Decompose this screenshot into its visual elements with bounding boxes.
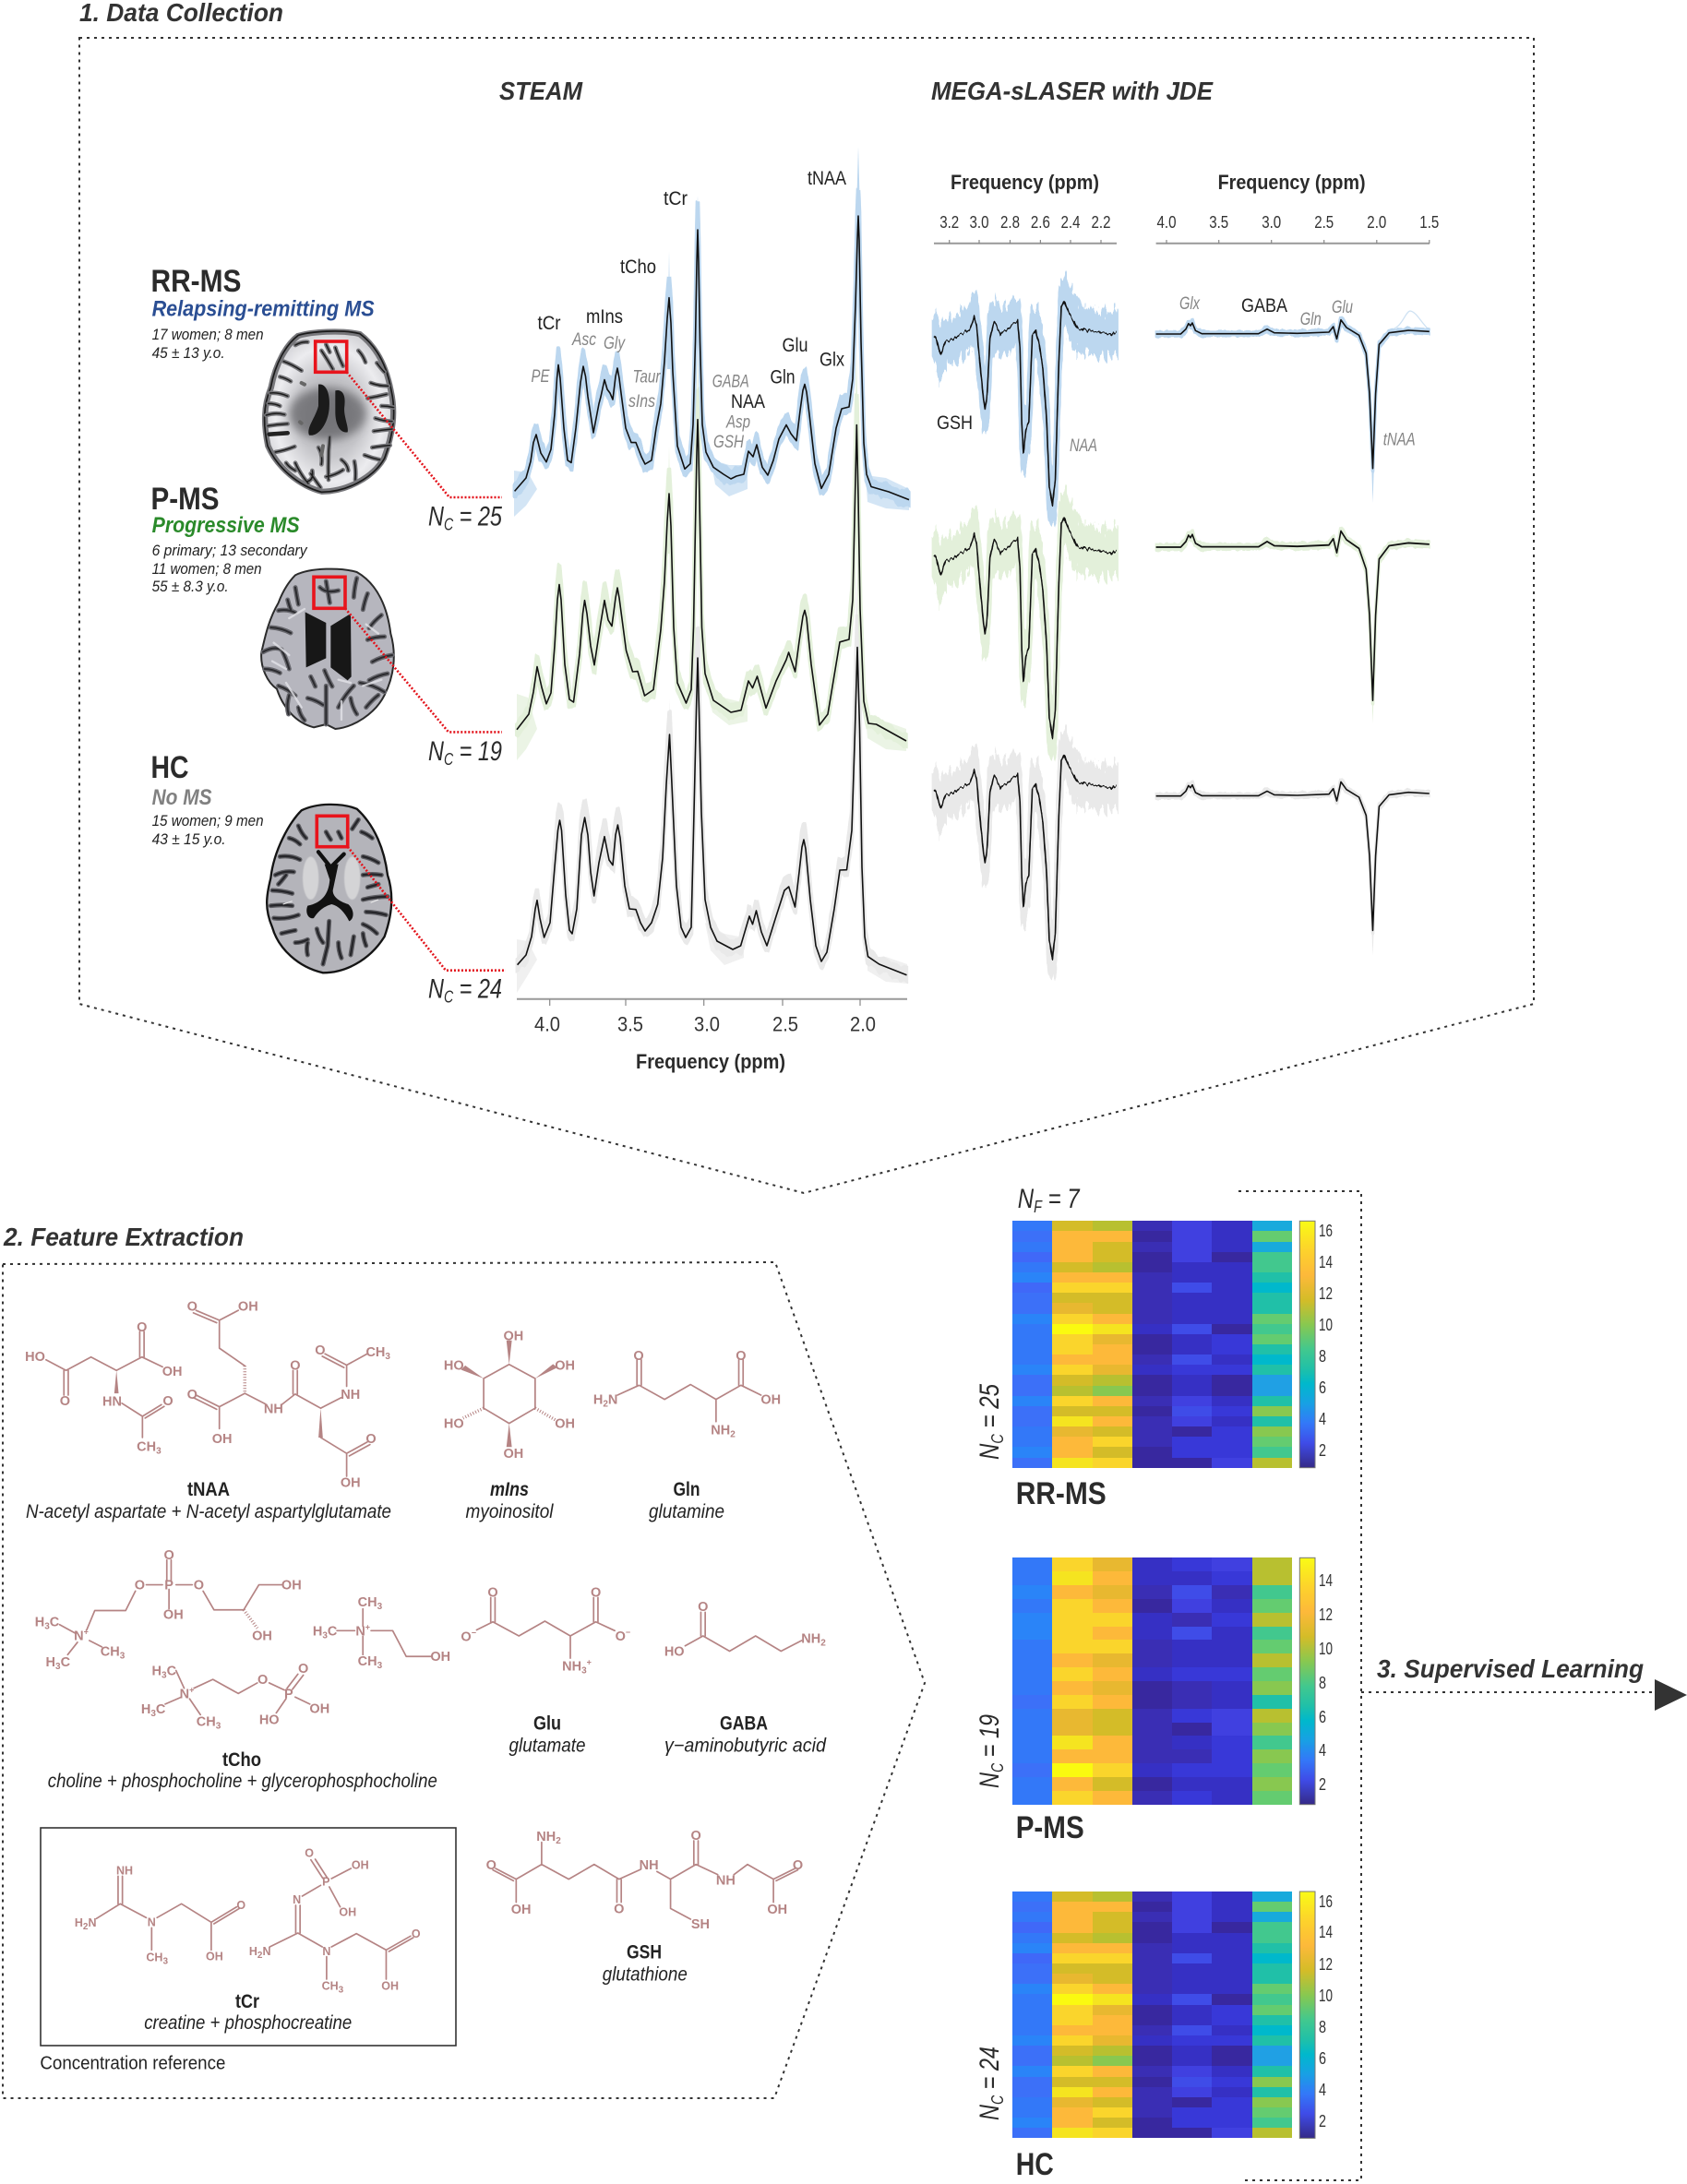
molecule atoms: tCr: N <box>322 1945 330 1958</box>
group label: RR-MS: 17 women; 8 men <box>152 326 264 343</box>
molecule atoms: GSH: NH <box>716 1873 736 1888</box>
heatmap: HC <box>1012 1892 1292 2138</box>
label: NF 7: = 7 <box>1042 1184 1081 1214</box>
colorbar: P-MS <box>1299 1557 1333 1805</box>
molecule atoms: tNAA: CH3 <box>137 1439 162 1456</box>
molecule atoms: Gln: NH2 <box>711 1423 736 1439</box>
STEAM peak labels: Asp <box>725 413 750 432</box>
STEAM peak labels: GABA <box>712 373 749 391</box>
molecule atoms: mIns <box>444 1329 575 1462</box>
colorbar: P-MS: 6 <box>1319 1708 1326 1726</box>
molecule atoms: tCr: H2N <box>249 1945 271 1961</box>
caption: mIns <box>465 1479 555 1522</box>
label: NC 25: = 25 <box>453 502 502 532</box>
label: NC 24: C <box>444 988 454 1007</box>
molecule atoms: tCr: O <box>412 1927 421 1940</box>
molecule atoms: Glu: NH3+ <box>562 1658 592 1677</box>
group label: HC: No MS <box>152 785 212 810</box>
molecule atoms: tCho: N+ <box>355 1622 370 1639</box>
caption: tCr: creatine + phosphocreatine <box>144 2012 352 2034</box>
caption: tNAA: tNAA <box>187 1479 230 1500</box>
MEGA-sLASER axis: GSH edit: 2.8 <box>1000 213 1020 232</box>
MEGA peak labels: NAA <box>1070 436 1097 456</box>
label: NC 25 heatmap: = 25 <box>975 1384 1005 1434</box>
MEGA peak labels: Glx <box>1179 294 1201 314</box>
MEGA-sLASER axis: GABA edit: 1.5 <box>1419 213 1439 232</box>
colorbar: HC: 16 <box>1319 1892 1333 1911</box>
molecule atoms: GSH: NH2 <box>536 1830 561 1846</box>
MEGA-sLASER axis: GABA edit: Frequency (ppm) <box>1218 171 1366 194</box>
colorbar: RR-MS: 6 <box>1319 1378 1326 1397</box>
STEAM peak labels: tCho <box>620 257 656 278</box>
STEAM frequency axis: 3.0 <box>694 1013 720 1036</box>
heading: STEAM: STEAM <box>499 77 583 105</box>
group label: RR-MS: Relapsing-remitting MS <box>152 297 375 322</box>
molecule atoms: tCr: N <box>148 1915 156 1928</box>
molecule atoms: tCho: H3C <box>141 1702 166 1719</box>
STEAM frequency axis: 4.0 <box>534 1013 560 1036</box>
group label: P-MS: Progressive MS <box>152 513 300 538</box>
molecule atoms: tNAA: O <box>137 1320 147 1335</box>
brain scan: P-MS <box>261 569 394 729</box>
colorbar: P-MS: 14 <box>1319 1571 1333 1590</box>
MEGA peak labels: GSH <box>937 412 973 434</box>
label: NC 25 heatmap: N <box>975 1439 1005 1460</box>
molecule atoms: tCho: H3C <box>46 1655 71 1672</box>
molecule atoms: GABA: NH2 <box>801 1631 826 1648</box>
molecule atoms: tCho: OH <box>252 1629 272 1643</box>
label: NC 24 heatmap: = 24 <box>975 2047 1005 2095</box>
STEAM peak labels: sIns <box>628 392 655 412</box>
caption: tCho: tCho <box>222 1749 261 1771</box>
caption: Glu <box>509 1713 585 1757</box>
STEAM frequency axis: 2.5 <box>772 1013 798 1036</box>
label: NC 19: N <box>428 736 449 767</box>
molecule atoms: tCho: H3C <box>35 1616 60 1632</box>
STEAM spectrum band: HC <box>517 575 907 993</box>
molecule atoms: Gln: OH <box>760 1393 781 1408</box>
group label: P-MS: 11 women; 8 men <box>152 560 262 578</box>
molecule atoms: tCho: OH <box>281 1578 302 1593</box>
MEGA-sLASER axis: GABA edit <box>1156 171 1439 244</box>
molecule atoms: tCho: P <box>164 1578 173 1593</box>
molecule atoms: tCr: OH <box>206 1951 223 1963</box>
MEGA GABA spectrum: RR-MS <box>1156 311 1430 503</box>
colorbar: P-MS: 2 <box>1319 1775 1326 1794</box>
heatmap: RR-MS <box>1012 1221 1292 1468</box>
STEAM frequency axis: Frequency (ppm) <box>636 1050 785 1073</box>
label: NC 19 heatmap: = 19 <box>975 1714 1005 1763</box>
STEAM peak labels: PE <box>532 367 550 387</box>
molecule atoms: tCr: OH <box>339 1905 356 1918</box>
molecule atoms: GSH: OH <box>511 1903 531 1917</box>
molecule atoms: GSH: O <box>793 1858 803 1873</box>
molecule atoms: tCr: NH <box>116 1865 133 1878</box>
bracket: feature matrices outline <box>1238 1191 1361 2180</box>
molecule atoms: GSH: O <box>614 1902 624 1916</box>
colorbar: RR-MS: 10 <box>1319 1316 1333 1334</box>
STEAM frequency axis: 2.0 <box>850 1013 876 1036</box>
MEGA peak labels: Gln <box>1300 310 1322 329</box>
STEAM mean spectrum: RR-MS <box>515 216 909 500</box>
STEAM peak labels <box>532 168 846 452</box>
molecule atoms: tCho: OH <box>430 1650 450 1665</box>
callout: P-MS region of interest <box>314 577 502 732</box>
molecule atoms: mIns: HO <box>444 1417 464 1432</box>
MEGA-sLASER axis: GSH edit: 2.4 <box>1061 213 1080 232</box>
molecule atoms: tCho: CH3 <box>101 1644 126 1661</box>
molecule atoms: tCho: CH3 <box>358 1595 383 1612</box>
molecule atoms: tCho: HO <box>259 1713 280 1727</box>
MEGA peak labels <box>937 294 1416 456</box>
molecule atoms: tCho: O <box>298 1662 308 1677</box>
MEGA-sLASER axis: GSH edit: 2.6 <box>1031 213 1050 232</box>
MEGA-sLASER axis: GSH edit <box>934 171 1117 244</box>
STEAM spectrum band: RR-MS <box>514 147 909 517</box>
molecule atoms: Glu: O <box>591 1586 601 1601</box>
colorbar: RR-MS <box>1299 1221 1333 1468</box>
caption: GSH <box>603 1942 688 1986</box>
arrow: to supervised learning <box>1361 1679 1687 1711</box>
group label: P-MS: P-MS <box>151 482 220 517</box>
molecule atoms: mIns: OH <box>555 1358 575 1373</box>
caption: tCho <box>48 1749 437 1792</box>
molecule atoms: Gln: O <box>633 1349 644 1364</box>
STEAM peak labels: GSH <box>713 433 744 452</box>
group label: P-MS: 6 primary; 13 secondary <box>152 542 308 559</box>
molecule atoms: GABA: HO <box>664 1644 685 1659</box>
STEAM peak labels: Gln <box>770 367 796 388</box>
molecule atoms: tNAA: O <box>187 1300 197 1315</box>
panel: feature extraction outline <box>3 1262 925 2098</box>
label: NC 19 heatmap: N <box>975 1768 1005 1788</box>
heatmap name: HC: HC <box>1016 2147 1054 2182</box>
heatmap name: RR-MS: RR-MS <box>1016 1476 1107 1511</box>
brain scan: HC <box>267 805 391 973</box>
label: NC 19 heatmap: C <box>988 1762 1007 1772</box>
molecule atoms: tCho: CH3 <box>197 1714 221 1731</box>
group label: P-MS: 55 ± 8.3 y.o. <box>152 578 229 595</box>
group label: RR-MS: 45 ± 13 y.o. <box>152 344 225 362</box>
caption: GABA: GABA <box>720 1713 768 1734</box>
MEGA-sLASER axis: GSH edit: Frequency (ppm) <box>951 171 1099 194</box>
STEAM peak labels: Taur <box>633 368 661 388</box>
MEGA peak labels: tNAA <box>1383 431 1416 450</box>
molecule atoms: tCr: OH <box>352 1859 369 1872</box>
STEAM peak labels: tCr <box>537 313 561 334</box>
molecule atoms: tCho: CH3 <box>358 1654 383 1671</box>
molecule atoms: tCr: O <box>236 1899 245 1912</box>
caption: tCho: choline + phosphocholine + glycerophosphocholine <box>48 1771 437 1792</box>
group label: P-MS <box>151 482 308 595</box>
molecule atoms: tCho: O <box>163 1548 174 1563</box>
molecule atoms: Glu <box>461 1586 630 1677</box>
caption: Gln: glutamine <box>649 1501 724 1522</box>
molecule atoms: tNAA: OH <box>238 1300 258 1315</box>
molecule atoms: tNAA: O <box>315 1343 326 1358</box>
molecule atoms: tCr: CH3 <box>322 1979 344 1995</box>
STEAM frequency axis: 3.5 <box>617 1013 643 1036</box>
label: NC 25: C <box>444 516 454 534</box>
molecule atoms: tCho: N+ <box>180 1685 194 1701</box>
colorbar: RR-MS: 8 <box>1319 1347 1326 1366</box>
molecule atoms: tCr: O <box>305 1846 314 1859</box>
caption: concentration reference: Concentration reference <box>40 2054 225 2074</box>
molecule atoms: tCho: N+ <box>74 1627 89 1643</box>
molecule atoms: GSH: SH <box>691 1917 710 1932</box>
group label: RR-MS: RR-MS <box>151 264 242 299</box>
label: NC 24: N <box>428 974 449 1005</box>
caption: mIns: myoinositol <box>465 1501 555 1522</box>
caption: tNAA: N-acetyl aspartate + N-acetyl aspartylglutamate <box>26 1501 391 1522</box>
molecule atoms: GSH: O <box>691 1829 701 1844</box>
STEAM peak labels: Glu <box>783 335 808 356</box>
label: NC 19: C <box>444 750 454 769</box>
molecule atoms: tNAA: OH <box>341 1476 361 1491</box>
colorbar: HC: 14 <box>1319 1923 1333 1941</box>
molecule atoms: tNAA: NH <box>264 1402 283 1417</box>
colorbar: RR-MS: 16 <box>1319 1222 1333 1240</box>
STEAM peak labels: Glx <box>820 350 844 371</box>
molecule atoms: mIns: OH <box>555 1417 575 1432</box>
molecule bonds: tCr and GSH <box>96 1841 798 1979</box>
group label: HC: 15 women; 9 men <box>152 812 264 829</box>
STEAM peak labels: tNAA <box>808 168 846 189</box>
group label: RR-MS <box>151 264 375 362</box>
MEGA GSH spectrum: RR-MS <box>934 301 1117 505</box>
colorbar: P-MS: 12 <box>1319 1605 1333 1624</box>
heatmap: P-MS <box>1012 1557 1292 1805</box>
molecule atoms: tCho <box>35 1548 450 1731</box>
molecule atoms: tCr: P <box>322 1875 329 1888</box>
colorbar: P-MS: 10 <box>1319 1640 1333 1658</box>
MEGA-sLASER axis: GSH edit: 3.2 <box>939 213 959 232</box>
MEGA-sLASER axis: GSH edit: 3.0 <box>969 213 989 232</box>
MEGA-sLASER axis: GABA edit: 3.5 <box>1209 213 1228 232</box>
molecule atoms: Gln <box>593 1349 781 1439</box>
molecule atoms: Glu: O <box>487 1586 498 1601</box>
colorbar: HC: 6 <box>1319 2049 1326 2068</box>
heatmap name: P-MS: P-MS <box>1016 1810 1084 1845</box>
group label: HC: 43 ± 15 y.o. <box>152 830 226 848</box>
molecule bonds: first two rows <box>46 1310 802 1714</box>
molecule atoms: tCho: P <box>284 1687 293 1701</box>
MEGA GABA spectrum: P-MS <box>1156 531 1430 723</box>
colorbar: HC: 2 <box>1319 2112 1326 2130</box>
caption: Gln <box>649 1479 724 1522</box>
STEAM mean spectrum: HC <box>518 648 906 975</box>
molecule atoms: tCr: CH3 <box>146 1951 168 1967</box>
molecule atoms: tNAA: NH <box>341 1388 360 1402</box>
molecule atoms: mIns: OH <box>504 1329 523 1343</box>
molecule atoms: Gln: O <box>736 1349 747 1364</box>
caption: GABA: γ−aminobutyric acid <box>664 1736 827 1757</box>
molecule atoms: tCr <box>75 1846 421 1995</box>
molecule atoms: mIns: OH <box>504 1447 523 1462</box>
caption: Glu: Glu <box>533 1713 561 1734</box>
molecule atoms: GABA <box>664 1600 826 1659</box>
molecule atoms: tNAA: O <box>187 1388 197 1402</box>
label: NC 24 heatmap: N <box>975 2100 1005 2120</box>
MEGA-sLASER axis: GSH edit: 2.2 <box>1091 213 1111 232</box>
heading: MEGA-sLASER with JDE: MEGA-sLASER with JDE <box>931 77 1214 105</box>
molecule atoms: tNAA: OH <box>162 1365 182 1379</box>
panel: data collection outline <box>79 38 1534 1193</box>
caption: GSH: glutathione <box>603 1964 688 1986</box>
colorbar: HC: 10 <box>1319 1987 1333 2005</box>
MEGA peak labels: GABA <box>1241 295 1287 316</box>
caption: Gln: Gln <box>674 1479 700 1500</box>
molecule atoms: tNAA: O <box>162 1394 173 1409</box>
MEGA GSH spectrum: HC <box>934 755 1117 959</box>
MEGA GABA spectrum: HC <box>1156 782 1430 956</box>
MEGA-sLASER axis: GABA edit: 2.5 <box>1314 213 1334 232</box>
brain scan: RR-MS <box>261 328 398 495</box>
molecule atoms: tNAA: HO <box>25 1350 45 1365</box>
caption: tCr: tCr <box>235 1991 259 2012</box>
molecule atoms: Glu: O− <box>461 1628 476 1644</box>
colorbar: HC: 8 <box>1319 2018 1326 2036</box>
caption: Glu: glutamate <box>509 1736 585 1757</box>
label: NC 25: N <box>428 502 449 532</box>
molecule atoms: tCho: O <box>194 1578 204 1593</box>
molecule atoms: Gln: H2N <box>593 1393 617 1410</box>
colorbar: HC: 12 <box>1319 1955 1333 1974</box>
label: NF 7: N <box>1018 1184 1037 1214</box>
colorbar: RR-MS: 12 <box>1319 1284 1333 1303</box>
STEAM peak labels: mIns <box>586 306 623 328</box>
molecule atoms: tCho: H3C <box>152 1665 177 1681</box>
concentration reference box <box>41 1828 456 2046</box>
label: NC 24 heatmap: C <box>988 2094 1007 2105</box>
molecule atoms: GABA: O <box>698 1600 708 1615</box>
MEGA-sLASER axis: GABA edit: 2.0 <box>1367 213 1386 232</box>
molecule atoms: tNAA <box>25 1300 390 1491</box>
group label: HC <box>151 750 264 848</box>
colorbar: RR-MS: 2 <box>1319 1441 1326 1460</box>
colorbar: RR-MS: 14 <box>1319 1253 1333 1271</box>
molecule atoms: tCho: OH <box>163 1608 184 1623</box>
MEGA GSH spectrum: P-MS <box>934 517 1117 737</box>
MEGA peak labels: Glu <box>1332 298 1353 317</box>
molecule atoms: tCr: N <box>293 1893 301 1906</box>
STEAM peak labels: NAA <box>731 391 765 412</box>
caption: GSH: GSH <box>627 1942 662 1963</box>
STEAM spectrum band: P-MS <box>517 351 906 760</box>
colorbar: P-MS: 4 <box>1319 1741 1326 1760</box>
colorbar: HC <box>1299 1892 1333 2138</box>
molecule atoms: tNAA: O <box>290 1358 301 1373</box>
STEAM peak labels: Gly <box>604 334 626 353</box>
callout: HC region of interest <box>317 816 506 971</box>
molecule atoms: tCr: OH <box>381 1979 399 1992</box>
molecule atoms: tCr: H2N <box>75 1916 97 1932</box>
label: NC 19: = 19 <box>453 736 502 767</box>
molecule atoms: Glu: O− <box>616 1628 630 1644</box>
label: NC 25 heatmap: C <box>988 1433 1007 1444</box>
colorbar: P-MS: 8 <box>1319 1674 1326 1692</box>
molecule atoms: mIns: HO <box>444 1358 464 1373</box>
molecule atoms: tNAA: O <box>365 1432 377 1447</box>
molecule atoms: tNAA: HN <box>102 1395 122 1410</box>
molecule atoms: tNAA: OH <box>212 1432 232 1447</box>
label: NC 24: = 24 <box>453 974 502 1005</box>
STEAM frequency axis <box>517 999 907 1073</box>
title: feature extraction: 2. Feature Extraction <box>3 1223 244 1251</box>
STEAM peak labels: Asc <box>571 330 596 350</box>
caption: tNAA <box>26 1479 391 1522</box>
molecule atoms: GSH: NH <box>640 1858 659 1873</box>
title: supervised learning: 3. Supervised Learning <box>1377 1654 1644 1683</box>
callout: RR-MS region of interest <box>316 341 502 497</box>
molecule atoms: tCho: O <box>135 1578 145 1593</box>
molecule atoms: tCho: O <box>257 1673 268 1688</box>
molecule atoms: tNAA: CH3 <box>365 1345 390 1362</box>
MEGA-sLASER axis: GABA edit: 3.0 <box>1262 213 1281 232</box>
colorbar: HC: 4 <box>1319 2081 1326 2099</box>
STEAM peak labels: tCr <box>664 188 688 209</box>
molecule atoms: GSH: OH <box>767 1903 787 1917</box>
STEAM mean spectrum: P-MS <box>517 420 906 741</box>
MEGA-sLASER axis: GABA edit: 4.0 <box>1157 213 1176 232</box>
molecule atoms: GSH: O <box>486 1858 497 1873</box>
group label: HC: HC <box>151 750 188 785</box>
molecule atoms: GSH <box>486 1829 803 1932</box>
colorbar: RR-MS: 4 <box>1319 1410 1326 1428</box>
caption: GABA <box>664 1713 827 1757</box>
label: NF 7: F <box>1034 1198 1043 1216</box>
molecule atoms: tCho: OH <box>309 1701 329 1716</box>
molecule atoms: tCho: H3C <box>313 1624 338 1641</box>
caption: tCr <box>144 1991 352 2034</box>
molecule atoms: tNAA: O <box>60 1394 70 1409</box>
caption: mIns: mIns <box>490 1479 529 1500</box>
